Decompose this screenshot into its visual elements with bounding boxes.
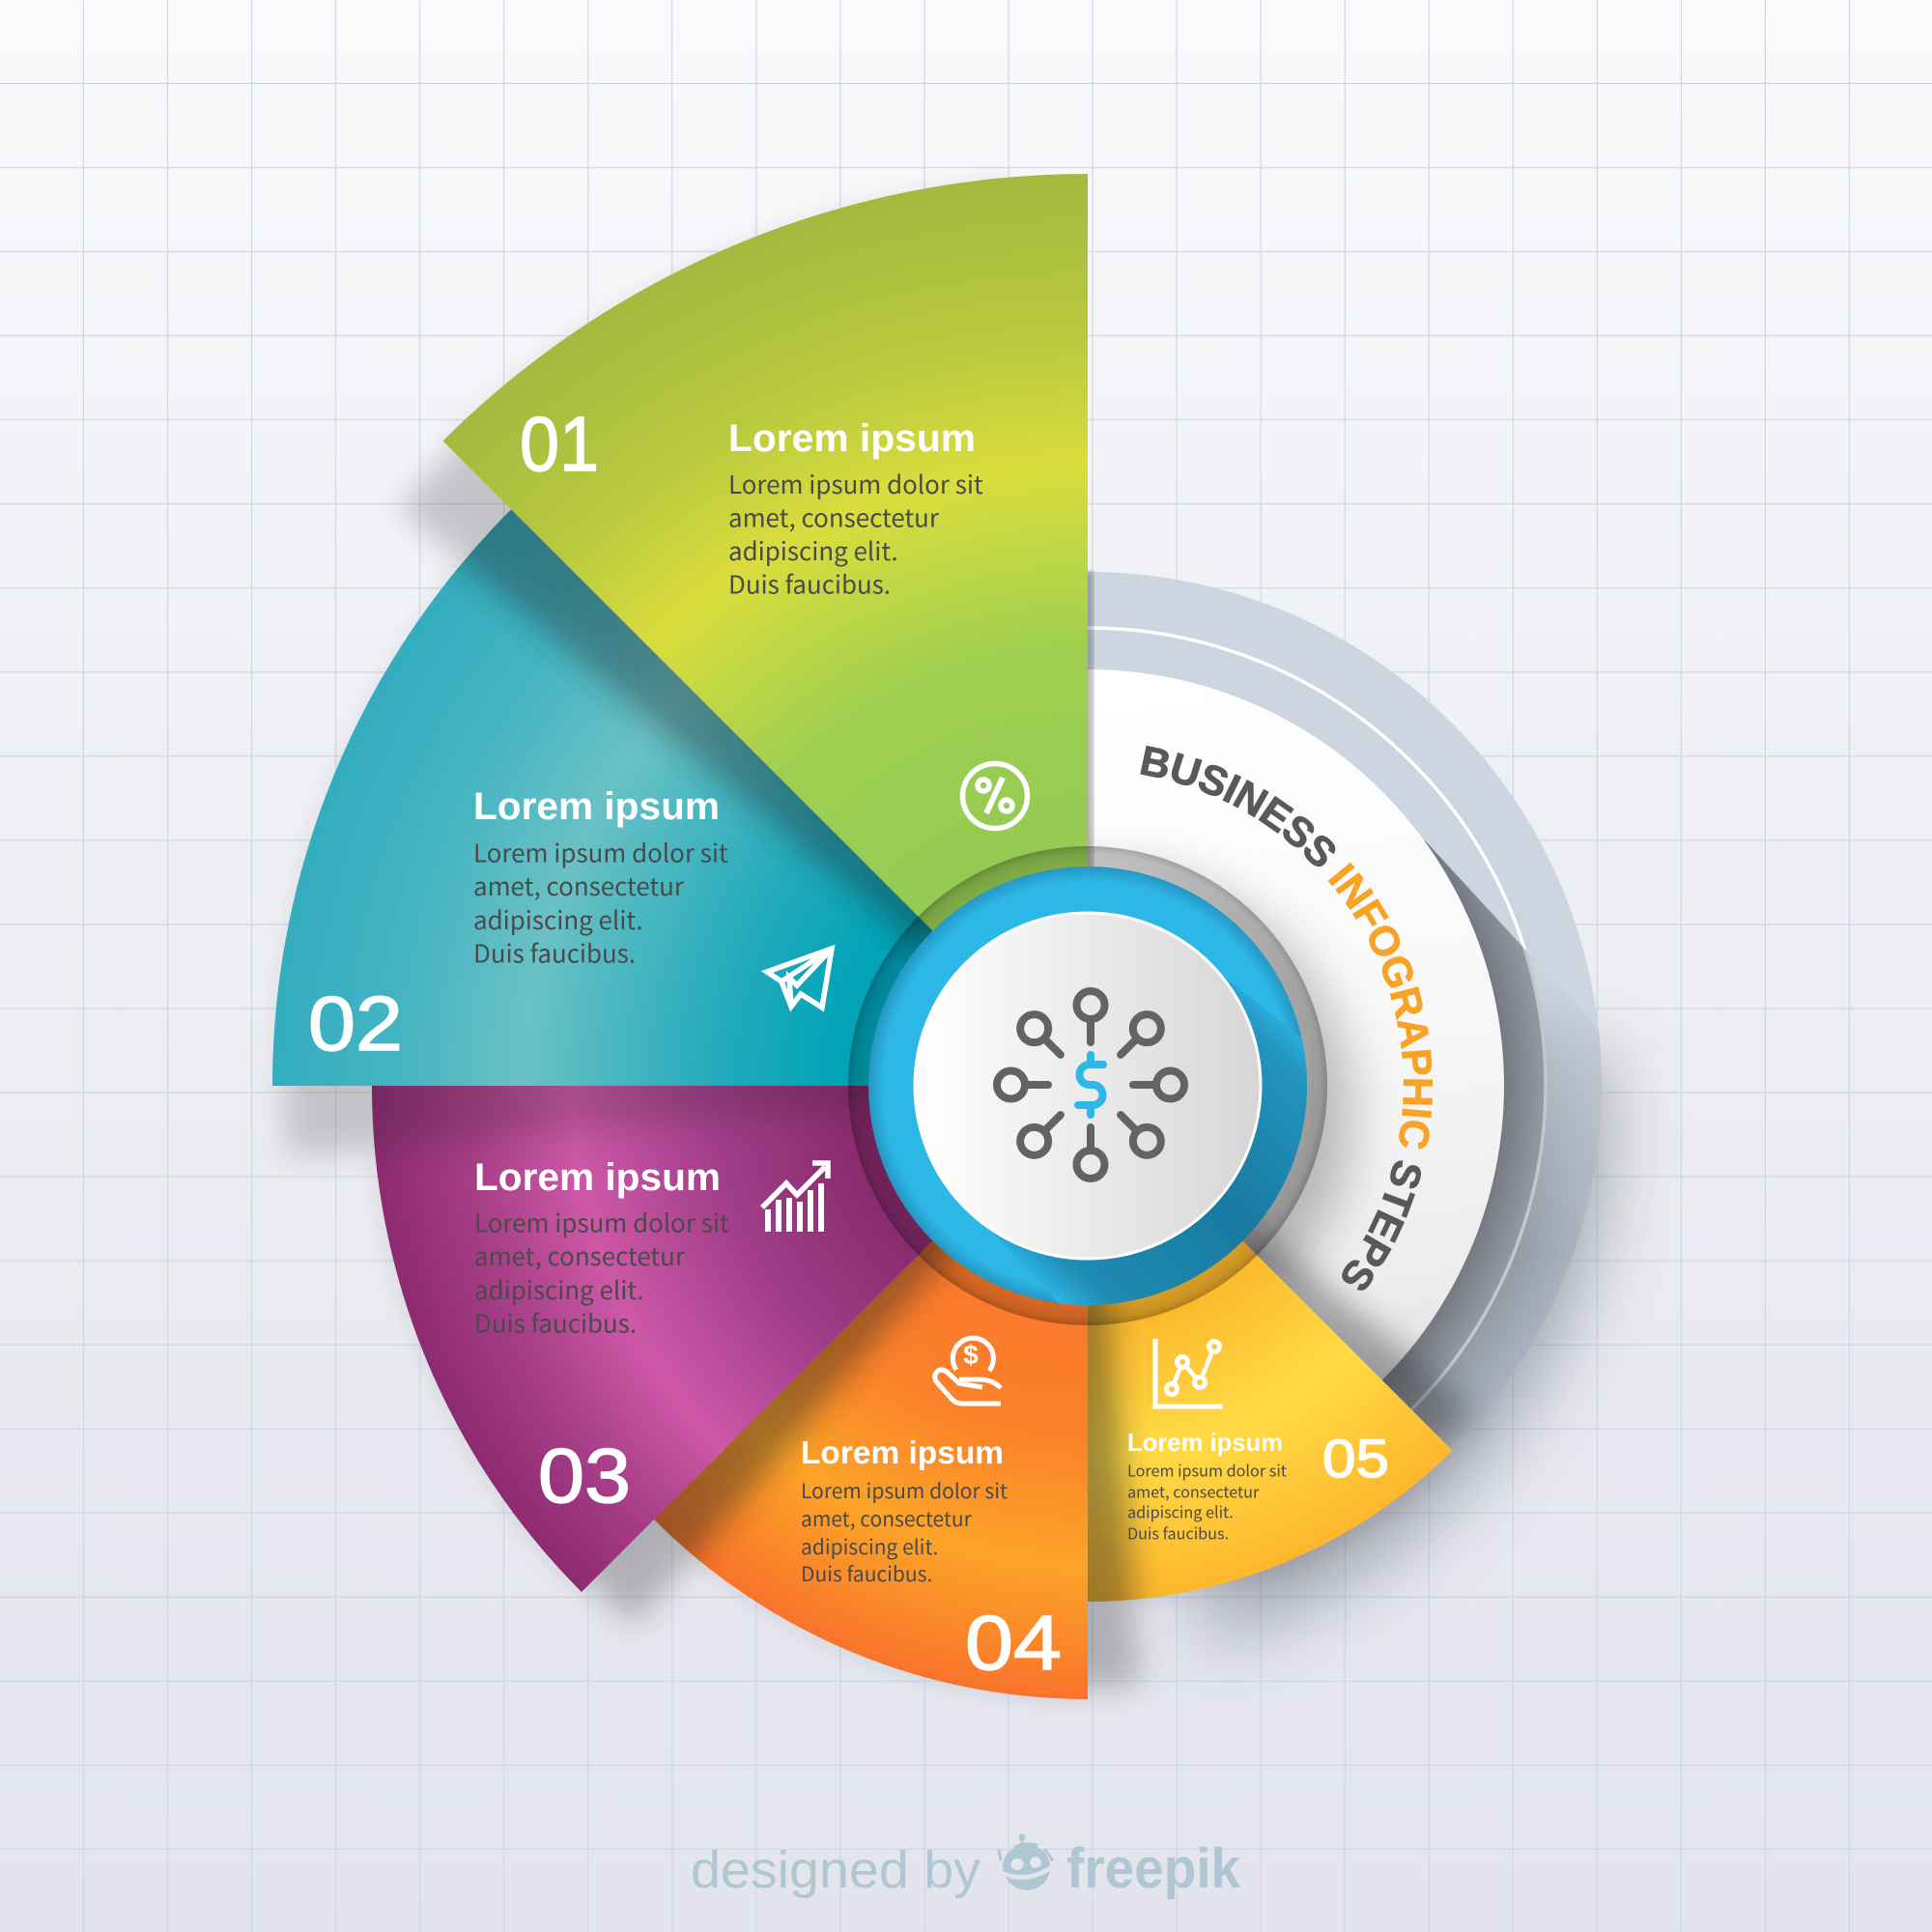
step 01 content xyxy=(520,401,983,601)
step 03 content: Lorem ipsum xyxy=(474,1156,721,1199)
blue hub ring with long shadow xyxy=(868,867,1319,1319)
icon: hand holding coin: $ xyxy=(963,1340,979,1370)
step 02 content: Duis faucibus. xyxy=(473,935,636,970)
step 02 content: amet, consectetur xyxy=(473,867,685,903)
icon: percent badge xyxy=(962,763,1028,829)
step 01 content: adipiscing elit. xyxy=(728,532,898,568)
step 05 content: amet, consectetur xyxy=(1127,1480,1260,1503)
step 05 sector xyxy=(1088,1055,1487,1602)
step 03 content xyxy=(474,1156,729,1519)
step 02 content: Lorem ipsum xyxy=(473,785,720,828)
step 03 content: Duis faucibus. xyxy=(474,1304,637,1341)
step 02 sector xyxy=(238,509,1088,1156)
step 03 content: Lorem ipsum dolor sit xyxy=(474,1204,729,1240)
step 05 content: 05 xyxy=(1322,1428,1389,1489)
footer credit: designed by xyxy=(691,1841,980,1899)
footer credit: freepik xyxy=(1066,1837,1241,1900)
icon: line chart xyxy=(1155,1339,1223,1406)
step 01 sector xyxy=(395,174,1094,958)
step 04 sector xyxy=(654,1240,1153,1705)
step 04 content: Lorem ipsum dolor sit xyxy=(801,1476,1008,1505)
step 02 content xyxy=(308,785,728,1066)
step 04 content: adipiscing elit. xyxy=(801,1532,938,1561)
icon: dollar with eight radial keys xyxy=(997,991,1184,1179)
step 05 content: Lorem ipsum dolor sit xyxy=(1127,1459,1287,1482)
backing disc stack xyxy=(1088,572,1602,1441)
step 02 content: 02 xyxy=(308,980,403,1066)
step 01 content: 01 xyxy=(520,401,599,487)
step 04 content: 04 xyxy=(965,1600,1062,1686)
step 05 content: adipiscing elit. xyxy=(1127,1499,1234,1522)
step 01 content: Duis faucibus. xyxy=(728,566,891,601)
translucent hub ring xyxy=(848,846,1327,1325)
step 04 content: amet, consectetur xyxy=(801,1504,973,1533)
step 05 content: Duis faucibus. xyxy=(1127,1520,1229,1544)
step 03 content: adipiscing elit. xyxy=(474,1271,644,1307)
icon: rising bar chart xyxy=(762,1163,828,1232)
step 01 content: Lorem ipsum xyxy=(728,417,976,460)
footer credit xyxy=(691,1833,1241,1900)
icon: paper plane xyxy=(767,949,832,1008)
curved title: BUSINESS INFOGRAPHIC STEPS xyxy=(1140,746,1434,1291)
icon: hand holding coin xyxy=(935,1338,1001,1404)
step 05 content: Lorem ipsum xyxy=(1127,1428,1283,1457)
soft shadow of the discs xyxy=(1198,1053,1606,1642)
step 02 content: adipiscing elit. xyxy=(473,901,643,937)
step 01 content: Lorem ipsum dolor sit xyxy=(728,466,983,501)
step 04 content: Duis faucibus. xyxy=(801,1559,932,1588)
step 02 content: Lorem ipsum dolor sit xyxy=(473,835,728,869)
step 03 content: 03 xyxy=(538,1433,631,1519)
step 04 content xyxy=(801,1435,1062,1686)
step 04 content: Lorem ipsum xyxy=(801,1435,1004,1470)
step 03 sector xyxy=(372,1086,962,1633)
white text disc xyxy=(794,669,1504,1380)
step 03 content: amet, consectetur xyxy=(474,1237,686,1273)
white centre disc xyxy=(915,913,1261,1259)
step 01 content: amet, consectetur xyxy=(728,498,940,535)
step 05 content xyxy=(1127,1428,1389,1544)
